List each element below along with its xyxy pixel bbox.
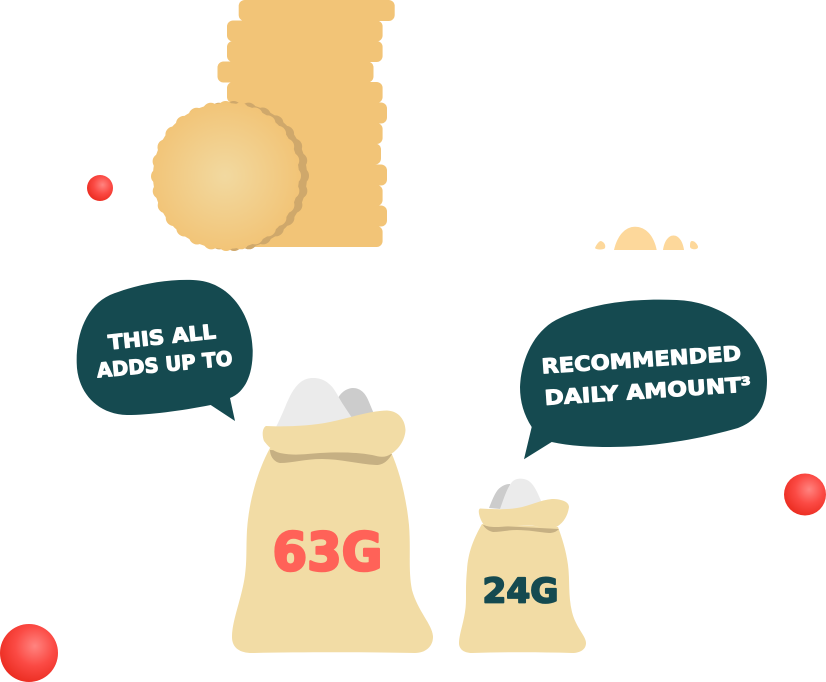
- sack body: [459, 524, 586, 653]
- small sugar mounds: [595, 227, 698, 250]
- small sugar sack: 24g: [459, 479, 586, 653]
- sugar mound: grey: [489, 484, 512, 510]
- sack label 63g: 63G: [272, 522, 382, 584]
- coin shadow: [161, 103, 307, 249]
- sack collar: [263, 410, 406, 457]
- coin face: [153, 103, 299, 249]
- bubble text line 2: ADDS UP TO: [96, 346, 233, 382]
- bubble text line 1: THIS ALL: [107, 319, 217, 354]
- sugar mound: grey: [338, 388, 374, 420]
- collar shadow: [483, 525, 559, 533]
- bubble text line 2: DAILY AMOUNT³: [544, 372, 752, 410]
- coin stack: [218, 0, 395, 247]
- red ball: right: [784, 474, 826, 516]
- speech bubble: this all adds up to: [77, 280, 253, 421]
- red ball: bottom left: [0, 624, 58, 682]
- sugar mound: white: [500, 479, 542, 512]
- collar shadow: [270, 450, 392, 465]
- red ball: left: [87, 175, 113, 201]
- sack body: [232, 448, 433, 653]
- sack collar: [479, 499, 569, 528]
- large sugar sack: 63g: [232, 378, 433, 653]
- sack label 24g: 24G: [482, 572, 558, 612]
- bubble text line 1: RECOMMENDED: [541, 341, 742, 378]
- sugar mound: white: [276, 378, 354, 432]
- scalloped coin: [153, 103, 307, 249]
- speech bubble: recommended daily amount: [520, 300, 767, 459]
